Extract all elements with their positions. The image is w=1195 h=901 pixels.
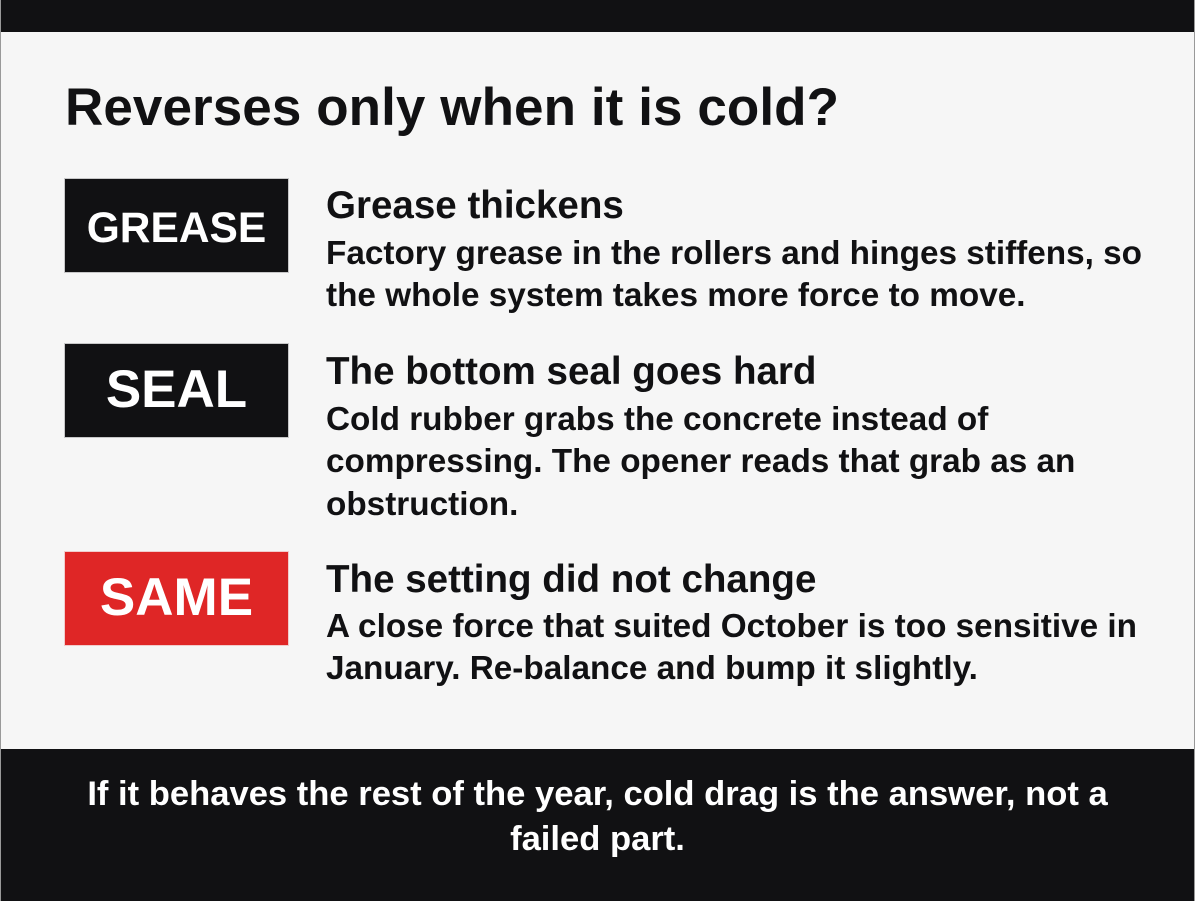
tag: SEAL [65,344,288,437]
footer text: If it behaves the rest of the year, cold drag is the answer, not a [87,775,1108,813]
footer text: failed part. [510,820,685,858]
text: same: A close force that suited October is too sensitive in [326,608,1137,645]
text: grease [326,235,1142,314]
text: seal: obstruction. [326,486,518,523]
left edge line [0,0,1,901]
text: seal: compressing. The opener reads that grab as an [326,443,1075,480]
top band [1,0,1194,32]
right edge line [1194,0,1195,901]
panel: same [64,551,1137,687]
footer text [87,775,1108,858]
text: seal [326,401,1075,523]
title: Reverses only when it is cold? [65,78,839,137]
text: same: January. Re-balance and bump it slightly. [326,650,978,687]
text: grease: Factory grease in the rollers and hinges stiffens, so [326,235,1142,272]
tag: SEAL: SEAL [106,360,247,419]
tag: SAME [65,552,288,645]
heading: seal: The bottom seal goes hard [326,350,816,393]
tag: GREASE: GREASE [87,205,266,252]
heading: grease: Grease thickens [326,184,624,227]
footer band [1,749,1194,901]
tag: GREASE [65,179,288,272]
text: seal: Cold rubber grabs the concrete instead of [326,401,988,438]
tag: SAME: SAME [100,568,253,627]
panel: grease [64,178,1142,314]
text: grease: the whole system takes more force to move. [326,277,1025,314]
text: same [326,608,1137,687]
panel: seal [64,343,1075,523]
heading: same: The setting did not change [326,558,816,601]
